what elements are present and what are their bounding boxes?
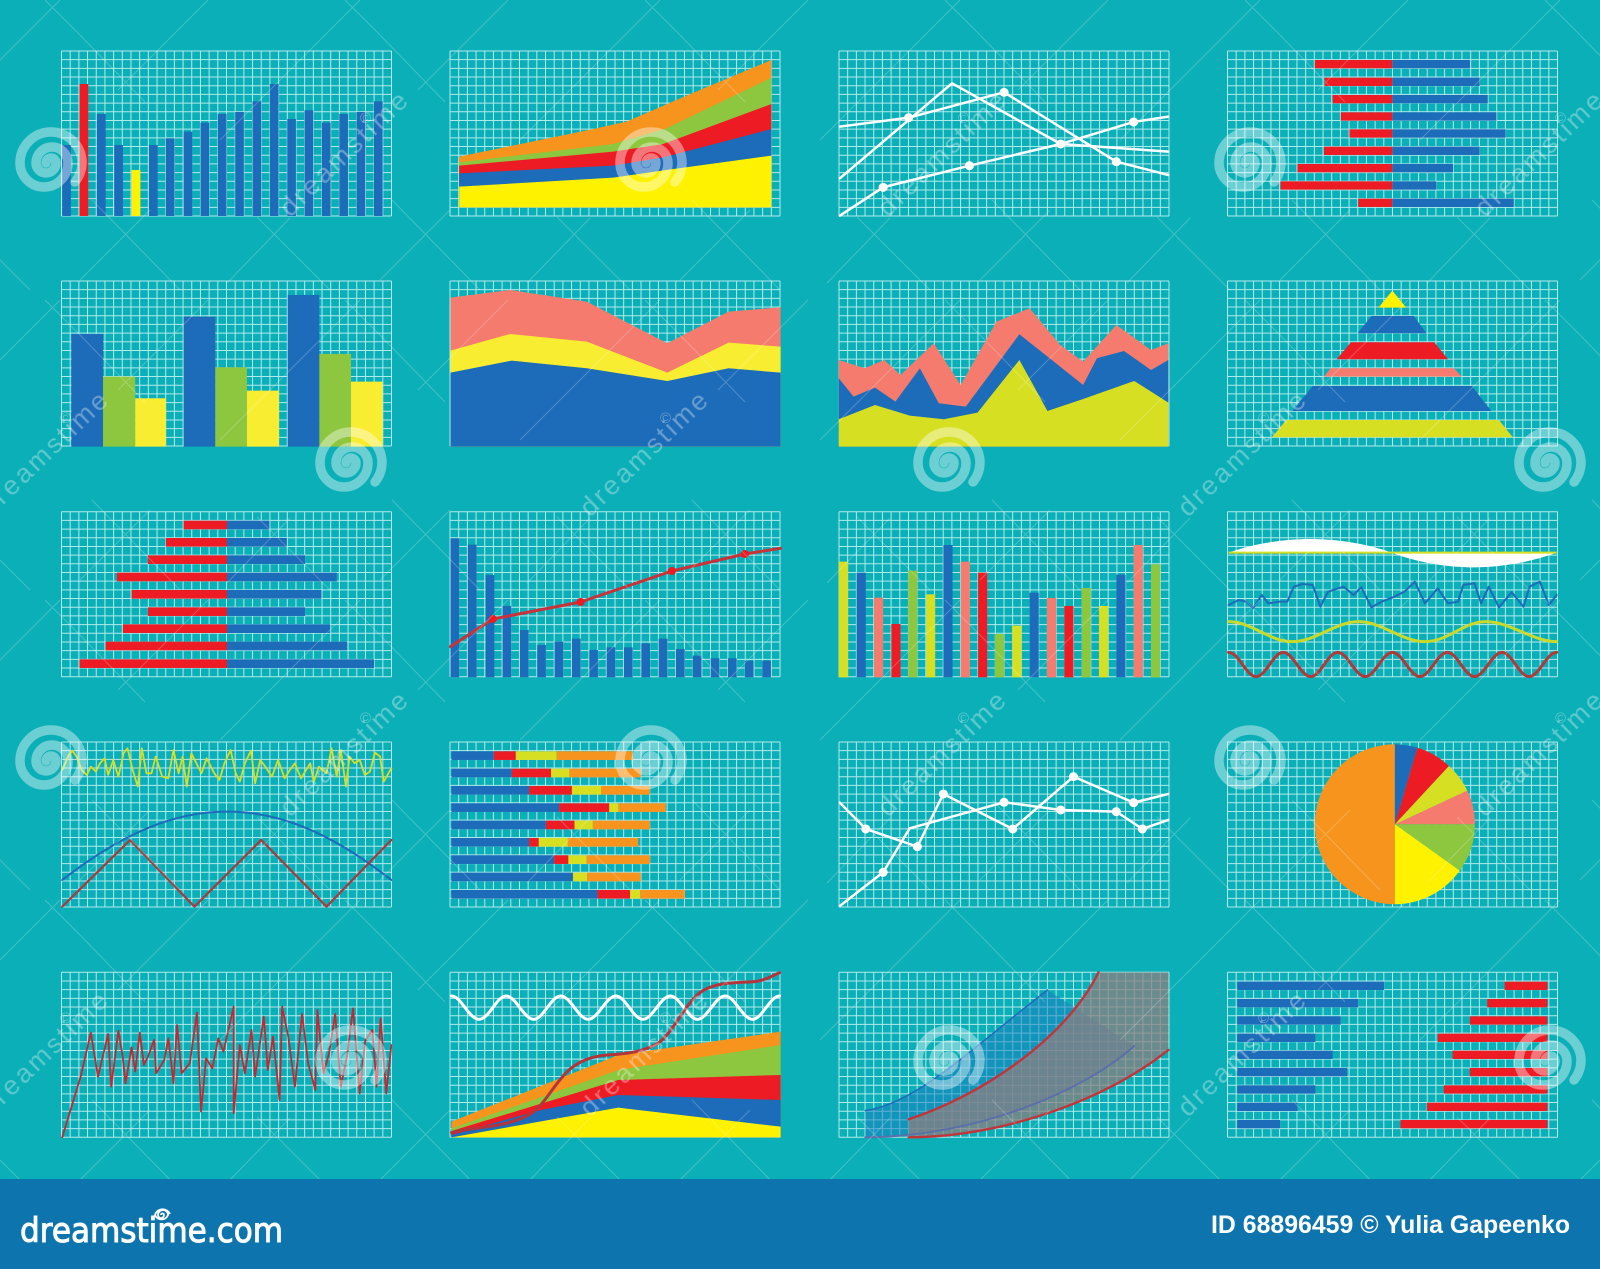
panel: waveforms bbox=[1228, 512, 1558, 677]
stacked bars bbox=[452, 751, 685, 899]
areas bbox=[451, 290, 781, 447]
noise line bbox=[62, 1007, 391, 1137]
watermark overlay: © bbox=[958, 710, 969, 727]
panel: noise, arc and triangle lines bbox=[62, 742, 392, 907]
panel: rising stacked area chart bbox=[450, 51, 780, 216]
watermark overlay: dreamstime bbox=[1171, 385, 1312, 522]
watermark overlay: dreamstime bbox=[273, 85, 414, 222]
panel: layered area chart bbox=[450, 281, 781, 447]
watermark overlay: dreamstime bbox=[871, 85, 1012, 222]
red and blue bars bbox=[1281, 60, 1514, 207]
bars bbox=[839, 545, 1160, 677]
watermark overlay: © bbox=[1555, 710, 1566, 727]
lines and markers bbox=[840, 83, 1168, 216]
panel: jagged area chart bbox=[839, 281, 1169, 447]
panel: overlapping exponential bands bbox=[839, 972, 1169, 1137]
wave lines bbox=[1229, 539, 1557, 677]
bars bbox=[62, 84, 383, 216]
signal lines bbox=[62, 748, 391, 907]
grouped bars bbox=[71, 295, 383, 447]
panel: stacked area with waves bbox=[450, 972, 781, 1137]
red and blue bars bbox=[80, 521, 374, 668]
panel: pie chart bbox=[1228, 742, 1558, 907]
panel: population pyramid bars bbox=[62, 512, 392, 677]
pie slices bbox=[1315, 744, 1475, 904]
watermark overlay: © bbox=[1555, 110, 1566, 127]
watermark overlay: dreamstime bbox=[871, 685, 1012, 822]
panel: separated horizontal bars bbox=[1228, 972, 1558, 1137]
watermark overlay: dreamstime bbox=[1171, 985, 1312, 1122]
logo text: dreamstime.com bbox=[20, 1211, 283, 1251]
bars and red line bbox=[451, 538, 781, 677]
watermark overlay: © bbox=[60, 410, 71, 427]
panel: white line chart with three series bbox=[839, 51, 1169, 216]
panel: grouped bar chart bbox=[62, 281, 392, 447]
watermark overlay: © bbox=[958, 110, 969, 127]
watermark overlay: © bbox=[1258, 410, 1269, 427]
watermark overlay: dreamstime bbox=[573, 985, 714, 1122]
areas and curves bbox=[452, 973, 781, 1137]
watermark overlay: © bbox=[60, 1010, 71, 1027]
watermark overlay: © bbox=[1258, 1010, 1269, 1027]
pyramid layers bbox=[1272, 291, 1513, 437]
panel: red noise line bbox=[62, 972, 392, 1137]
watermark overlay: © bbox=[660, 410, 671, 427]
panel: diverging horizontal bars bbox=[1228, 51, 1558, 216]
panel: pyramid chart bbox=[1228, 281, 1558, 446]
lines and markers bbox=[840, 773, 1168, 906]
blue and red bars bbox=[1237, 982, 1547, 1128]
watermark overlay: © bbox=[660, 1010, 671, 1027]
panel: bar chart with red and yellow highlights bbox=[62, 51, 392, 216]
panel: bars with cumulative line bbox=[450, 512, 781, 677]
stacked areas bbox=[459, 60, 771, 207]
footer bar bbox=[0, 1179, 1600, 1269]
image id and credit: ID 68896459 © Yulia Gapeenko bbox=[1211, 1211, 1570, 1239]
logo spiral bbox=[155, 1209, 170, 1219]
watermark overlay: © bbox=[360, 110, 371, 127]
bands and curves bbox=[865, 972, 1168, 1137]
panel: stacked horizontal bars bbox=[450, 742, 780, 907]
watermark overlay: dreamstime bbox=[573, 385, 714, 522]
panel: white line chart with two series bbox=[839, 742, 1169, 907]
watermark overlay: © bbox=[360, 710, 371, 727]
jagged areas bbox=[839, 308, 1168, 447]
panel: multicolor bar chart bbox=[839, 512, 1169, 677]
watermark overlay: dreamstime bbox=[273, 685, 414, 822]
